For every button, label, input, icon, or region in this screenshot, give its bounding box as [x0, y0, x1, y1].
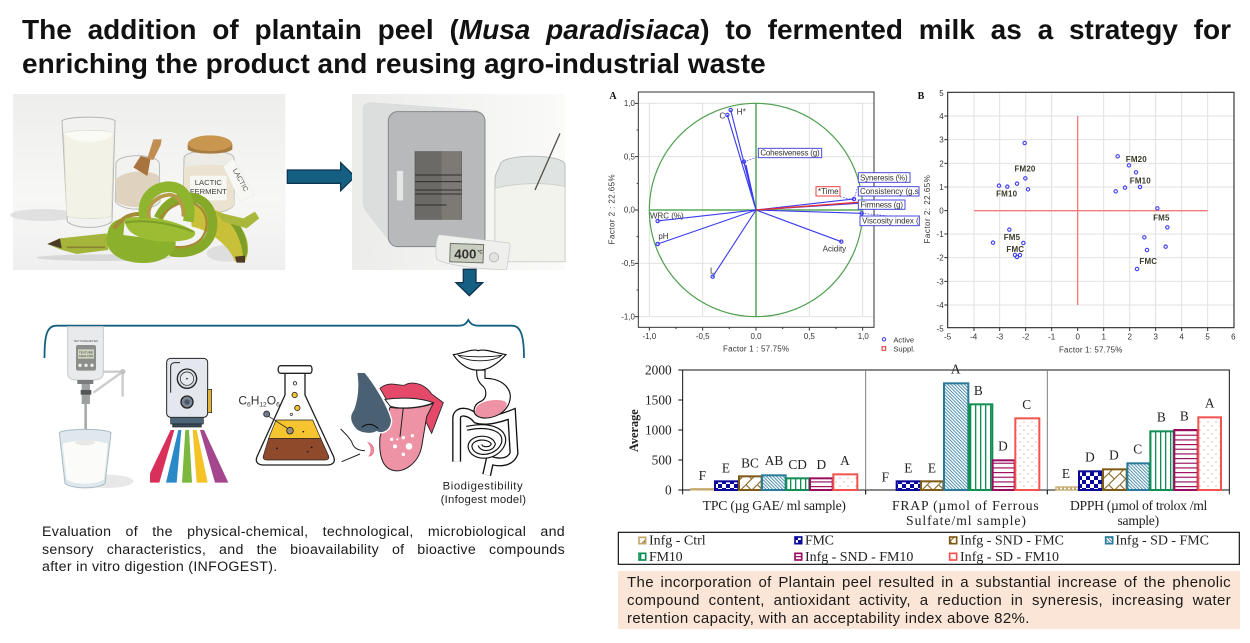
- significance letters: F: [699, 468, 706, 483]
- legend: bar chart series: Infg - SND - FM10: [805, 550, 913, 565]
- icon: flask with formula: C: [238, 393, 247, 407]
- bars: FRAP: [897, 383, 1039, 490]
- boxed labels: C: [719, 111, 725, 121]
- x axis category labels: TPC (µg GAE/ ml sample): [703, 498, 846, 514]
- axis ticks: -0,5: [621, 259, 636, 268]
- title: The addition of plantain peel (Musa paradisiaca) to fermented milk as a strategy for: [22, 14, 1231, 45]
- axis ticks: 0: [939, 206, 944, 215]
- axis ticks: -2: [937, 254, 944, 263]
- thermometer: 400: [454, 246, 476, 261]
- group labels: FM5: [1153, 213, 1170, 222]
- plantain peels: [47, 187, 259, 263]
- chart B: PCA sample scores: 4: [1179, 333, 1184, 342]
- boxed labels: WRC (%): [650, 211, 684, 220]
- significance letters: D: [998, 439, 1008, 454]
- icon: digestive tract, biodigestibility: (Infogest model): [441, 494, 526, 506]
- icon: texture analyser with glass of milk: TEXTURE: [79, 350, 93, 354]
- icon: flask with formula: H: [251, 393, 259, 407]
- chart B: PCA sample scores: Factor 1: 57.75%: [1059, 345, 1122, 354]
- chart B: PCA sample scores: -4: [970, 333, 978, 342]
- chart A: PCA variable loadings: Factor 2 : 22.65%: [608, 174, 617, 244]
- photo: milk, lactic ferment and plantain peel: [10, 94, 285, 270]
- axis ticks: 1,0: [624, 99, 636, 108]
- group labels: FM5: [1004, 233, 1021, 242]
- photo: incubator, yoghurt jar and thermometer: [352, 94, 565, 270]
- incubator: [363, 102, 485, 247]
- chart B: PCA sample scores: 3: [1153, 333, 1158, 342]
- y axis labels: [645, 362, 672, 497]
- chart B: PCA sample scores: [918, 89, 1236, 354]
- significance letters: B: [1180, 409, 1189, 424]
- legend: bar chart series: [618, 532, 1239, 565]
- axis ticks: -1: [937, 230, 944, 239]
- boxed labels: Syneresis (%): [860, 173, 908, 182]
- group labels: FM10: [996, 190, 1018, 199]
- icon: digestive tract, biodigestibility: [441, 350, 526, 506]
- significance letters: B: [1157, 410, 1166, 425]
- significance letters: C: [1133, 441, 1142, 456]
- axis ticks: 1: [939, 183, 944, 192]
- group labels: FM20: [1126, 155, 1147, 164]
- legend: active and supplementary: [882, 335, 915, 353]
- milk glass: [62, 117, 115, 227]
- ferment jar: LACTIC: [231, 168, 249, 193]
- icon: flask with formula: O: [267, 393, 276, 407]
- legend: active and supplementary: Active: [893, 335, 914, 344]
- legend: bar chart series: FM10: [649, 550, 683, 565]
- chart A: PCA variable loadings: 1,0: [858, 332, 869, 341]
- boxed labels: [650, 106, 919, 275]
- significance letters: F: [882, 469, 889, 484]
- legend: active and supplementary: Suppl.: [893, 344, 915, 353]
- significance letters: C: [1022, 397, 1031, 412]
- bar chart: TPC, FRAP and DPPH: [627, 361, 1229, 529]
- significance letters: B: [974, 383, 983, 398]
- significance letters: A: [951, 361, 961, 376]
- score points: [991, 141, 1169, 271]
- icon: flask with formula: 6: [276, 401, 280, 408]
- legend: bar chart series: Infg - SD - FM10: [960, 550, 1059, 565]
- x axis category labels: Sulfate/ml sample): [906, 513, 1026, 529]
- axis ticks: [621, 99, 636, 321]
- chart B: PCA sample scores: 6: [1231, 333, 1236, 342]
- callout: main result: The incorporation of Plantain peel resulted in a substantial increase of the phenolic: [627, 574, 1231, 591]
- sugar jar with wooden scoop: [115, 139, 162, 209]
- significance letters: E: [904, 460, 912, 475]
- arrow: down: [456, 269, 483, 296]
- axis ticks: -5: [937, 324, 944, 333]
- y axis labels: 500: [652, 452, 672, 467]
- boxed labels: Consistency (g.s: [860, 187, 919, 196]
- boxed labels: Cohesiveness (g): [760, 149, 820, 158]
- legend: bar chart series: Infg - SD - FMC: [1115, 533, 1209, 548]
- chart A: PCA variable loadings: 0,0: [750, 332, 762, 341]
- boxed labels: Firmness (g): [860, 200, 903, 209]
- icon: flask with formula: [238, 366, 334, 465]
- icon: flask with formula: 6: [247, 401, 251, 408]
- icon: flask with formula: 12: [259, 401, 267, 408]
- boxed labels: L: [710, 265, 715, 275]
- icon: colorimeter with coloured light beams: [150, 358, 228, 483]
- legend: bar chart series: Infg - Ctrl: [649, 533, 706, 548]
- chart B: PCA sample scores: 5: [1205, 333, 1210, 342]
- bar chart: TPC, FRAP and DPPH: Average: [627, 409, 641, 452]
- significance letters: AB: [765, 453, 783, 468]
- axis ticks: -4: [937, 301, 944, 310]
- significance letters: BC: [741, 455, 759, 470]
- axis ticks: -1,0: [621, 312, 636, 321]
- significance letters: [699, 361, 1215, 484]
- axis ticks: 5: [939, 89, 944, 98]
- ferment jar: [183, 135, 254, 213]
- arrow: right: [287, 163, 355, 191]
- icon: texture analyser with glass of milk: TEXTUREMETER: [73, 339, 99, 343]
- group labels: FM10: [1130, 176, 1151, 185]
- significance letters: A: [1205, 395, 1215, 410]
- significance letters: D: [1109, 448, 1119, 463]
- axis ticks: 2: [939, 159, 944, 168]
- axis ticks: 4: [939, 112, 944, 121]
- text block: evaluation summary: [42, 524, 565, 575]
- chart B: PCA sample scores: -3: [996, 333, 1004, 342]
- group labels: FMC: [1006, 245, 1024, 254]
- text block: evaluation summary: sensory characteristics, and the bioavailability of bioactive compounds: [42, 542, 565, 558]
- chart B: PCA sample scores: Factor 2: 22.65%: [923, 175, 932, 243]
- text block: evaluation summary: after in vitro digestion (INFOGEST).: [42, 559, 278, 575]
- x axis category labels: sample): [1117, 513, 1159, 529]
- chart A: PCA variable loadings: -1,0: [642, 332, 657, 341]
- significance letters: E: [1062, 466, 1070, 481]
- group labels: [996, 155, 1170, 266]
- icon: texture analyser with glass of milk: [59, 327, 133, 488]
- axis ticks: 0,5: [624, 152, 636, 161]
- ferment jar: FERMENT: [190, 187, 227, 196]
- chart A: PCA variable loadings: 0,5: [804, 332, 815, 341]
- text block: evaluation summary: Evaluation of the physical-chemical, technological, microbiological and: [42, 524, 565, 540]
- axis ticks: 0,0: [624, 206, 636, 215]
- legend: bar chart series: Infg - SND - FMC: [960, 533, 1064, 548]
- callout: main result: compound content, antioxidant activity, a reduction in syneresis, increasing water: [627, 592, 1231, 609]
- title: enriching the product and reusing agro-industrial waste: [22, 48, 766, 79]
- significance letters: A: [840, 453, 850, 468]
- callout: main result: retention capacity, with an acceptability index above 82%.: [627, 610, 1030, 627]
- title: [22, 14, 1231, 79]
- bars: TPC: [691, 474, 857, 490]
- significance letters: CD: [788, 457, 807, 472]
- chart A: PCA variable loadings: -0,5: [696, 332, 710, 341]
- significance letters: D: [817, 457, 827, 472]
- ferment jar: LACTIC: [195, 178, 222, 187]
- boxed labels: *Time: [818, 187, 839, 196]
- loading vectors: [656, 108, 863, 278]
- axis ticks: [937, 89, 944, 333]
- x axis category labels: DPPH (µmol of trolox /ml: [1070, 498, 1208, 514]
- boxed labels: Viscosity index (: [862, 216, 919, 225]
- thermometer: [436, 235, 510, 269]
- chart A: PCA variable loadings: [608, 91, 919, 354]
- boxed labels: pH: [658, 232, 669, 241]
- icon: texture analyser with glass of milk: ANALYSIS: [79, 354, 93, 358]
- chart B: PCA sample scores: B: [918, 91, 925, 102]
- significance letters: D: [1085, 450, 1095, 465]
- thermometer: ℃: [477, 249, 483, 255]
- significance letters: E: [928, 460, 936, 475]
- group labels: FMC: [1139, 257, 1157, 266]
- callout: main result: [618, 571, 1240, 629]
- yoghurt jar: [495, 133, 565, 262]
- x axis category labels: FRAP (µmol of Ferrous: [892, 498, 1039, 514]
- significance letters: E: [722, 460, 730, 475]
- y axis labels: 0: [665, 482, 672, 497]
- chart B: PCA sample scores: 2: [1127, 333, 1132, 342]
- boxed labels: Acidity: [823, 245, 846, 254]
- y axis labels: 1000: [645, 422, 672, 437]
- chart B: PCA sample scores: -5: [944, 333, 952, 342]
- x axis category labels: [703, 498, 1208, 529]
- chart B: PCA sample scores: 0: [1075, 333, 1080, 342]
- chart B: PCA sample scores: -1: [1048, 333, 1056, 342]
- y axis labels: 1500: [645, 392, 672, 407]
- bars: DPPH: [1056, 417, 1221, 490]
- boxed labels: H*: [737, 106, 747, 116]
- icon: nose and tongue for sensory analysis: [341, 372, 443, 471]
- axis ticks: -3: [937, 277, 944, 286]
- chart A: PCA variable loadings: Factor 1 : 57.75%: [723, 345, 789, 354]
- brace grouping analyses: [44, 320, 524, 358]
- chart A: PCA variable loadings: A: [609, 91, 617, 102]
- chart B: PCA sample scores: 1: [1101, 333, 1106, 342]
- icon: digestive tract, biodigestibility: Biodigestibility: [443, 480, 523, 492]
- chart B: PCA sample scores: -2: [1022, 333, 1030, 342]
- group labels: FM20: [1014, 164, 1036, 173]
- legend: bar chart series: FMC: [805, 533, 834, 548]
- axis ticks: 3: [939, 136, 944, 145]
- y axis labels: 2000: [645, 362, 672, 377]
